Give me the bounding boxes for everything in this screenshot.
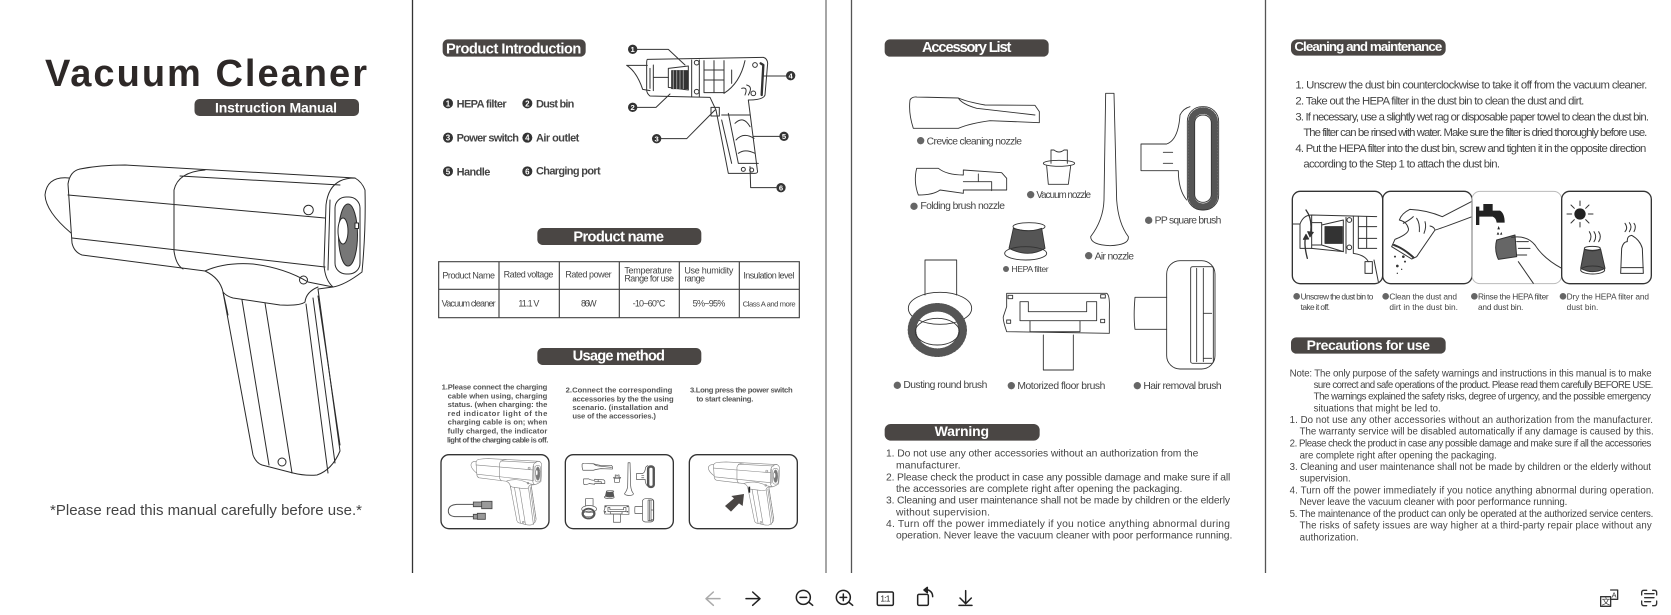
step 2 text: use of the accessories.) (572, 412, 656, 421)
warning list: 3. Cleaning and user maintenance shall not be made by children or the elderly (886, 496, 1231, 507)
table: product specifications: Vacuum cleaner (442, 299, 496, 309)
precautions list: supervision. (1300, 474, 1351, 485)
diagram: cutaway with numbered callouts: 6 (779, 183, 783, 192)
picture captions: dirt in the dust bin. (1389, 302, 1458, 312)
table: product specifications: Rated voltage (504, 270, 553, 280)
parts list: 1 (446, 99, 451, 108)
step 2 text: scenario. (installation and (572, 403, 669, 412)
heading: Usage method (537, 348, 701, 365)
diagram: cutaway with numbered callouts: 1 (631, 45, 636, 54)
precautions list: 5. The maintenance of the product can only be operated at the authorized service centers. (1290, 509, 1653, 520)
warning list: 1. Do not use any other accessories without an authorization from the (886, 449, 1199, 460)
heading: Product name (537, 228, 701, 246)
picture captions: Clean the dust and (1389, 291, 1457, 301)
parts list: 3 (446, 134, 451, 143)
accessory labels: Folding brush nozzle (920, 201, 1005, 212)
diagram: cutaway with numbered callouts: 3 (655, 134, 659, 143)
accessory labels (894, 136, 1222, 392)
step 3 text (690, 385, 793, 403)
step 1 text (442, 382, 548, 444)
accessory labels: Motorized floor brush (1017, 381, 1106, 392)
precautions list: 4. Turn off the power immediately if you notice anything abnormal during operation. (1290, 485, 1654, 496)
subtitle pill (194, 99, 359, 116)
step 2 text: 2.Connect the corresponding (566, 385, 673, 394)
picture captions (1293, 291, 1649, 312)
step 2 text (566, 385, 674, 421)
picture captions: Rinse the HEPA filter (1478, 291, 1549, 301)
diagram: cutaway with numbered callouts: 2 (631, 103, 635, 112)
step 3 text: to start cleaning. (696, 394, 753, 403)
table: product specifications: Product Name (442, 271, 495, 281)
step 1 text: status. (when charging: the (448, 400, 547, 409)
step 3 text: 3.Long press the power switch (690, 385, 793, 394)
page divider (412, 0, 414, 573)
parts list: HEPA filter (457, 98, 507, 110)
parts list: 5 (446, 167, 451, 176)
cleaning steps: The filter can be rinsed with water. Make sure the filter is dried thoroughly before use. (1303, 127, 1647, 139)
warning list: 4. Turn off the power immediately if you notice anything abnormal during (886, 519, 1230, 530)
heading: Usage method: Usage method (573, 349, 665, 365)
table: product specifications: Range for use (624, 274, 674, 284)
heading: Precautions for use: Precautions for use (1307, 337, 1430, 353)
accessory labels: PP square brush (1155, 215, 1222, 226)
step 1 text: light of the charging cable is off. (447, 435, 548, 444)
cleaning steps: according to the Step 1 to attach the dust bin. (1303, 159, 1500, 171)
picture: rinse filter (1472, 191, 1562, 284)
diagram: cutaway with numbered callouts (627, 45, 795, 192)
table: product specifications: Temperature (624, 266, 672, 276)
accessory labels: Vacuum nozzle (1036, 190, 1091, 201)
step 1 text: charging cable is on; when (448, 418, 548, 427)
precautions list: Never leave the vacuum cleaner with poor performance running. (1300, 497, 1567, 508)
table: product specifications: -10~60°C (633, 299, 666, 309)
precautions list: sure correct and safe operations of the product. Please read them carefully BEFORE USE. (1314, 380, 1653, 391)
step 1 text: fully charged, the indicator (448, 426, 547, 435)
icon: translate: A (1612, 591, 1617, 600)
diagram: cutaway with numbered callouts: 4 (789, 71, 794, 80)
panel: precautions for use (1290, 337, 1657, 607)
table: product specifications: 5%~95% (693, 299, 725, 309)
table: product specifications: Rated power (565, 270, 612, 280)
accessory drawings (908, 93, 1219, 370)
precautions list: situations that might be led to. (1314, 403, 1441, 414)
step 1 text: 1.Please connect the charging (442, 382, 548, 391)
toolbar (706, 587, 972, 605)
precautions list: The risks of safety issues are way higher at a third-party repair place without any (1300, 521, 1652, 532)
icon: scan text (1642, 590, 1657, 606)
table: product specifications: Use humidity (684, 266, 734, 276)
panel: cleaning and maintenance (1291, 39, 1651, 312)
precautions list: are complete right after opening the packaging. (1300, 450, 1497, 461)
panel: accessory list (885, 39, 1222, 392)
accessory labels: HEPA filter (1011, 264, 1049, 274)
panel: warning (885, 423, 1232, 542)
table: product specifications: 11.1 V (518, 299, 539, 309)
warning list: operation. Never leave the vacuum cleaner with poor performance running. (896, 531, 1232, 542)
parts list: Air outlet (536, 132, 580, 144)
icon: zoom out (796, 590, 813, 605)
picture captions: Dry the HEPA filter and (1567, 291, 1649, 301)
icon: next arrow (746, 592, 760, 605)
heading: Accessory List (885, 39, 1049, 57)
picture captions: take it off. (1301, 302, 1330, 312)
precautions list: 3. Cleaning and user maintenance shall not be made by children or the elderly without (1290, 462, 1651, 473)
step 3 picture (689, 455, 797, 529)
picture captions: Unscrew the dust bin to (1301, 291, 1374, 301)
icon: actual size: 1:1 (880, 594, 891, 604)
precautions list: Note: The only purpose of the safety warnings and instructions in this manual is to make (1290, 368, 1652, 379)
table: product specifications: range (684, 274, 705, 284)
cleaning steps: 1. Unscrew the dust bin counterclockwise to take it off from the vacuum cleaner. (1295, 80, 1647, 92)
heading: Warning (885, 423, 1040, 441)
accessory labels: Hair removal brush (1143, 381, 1222, 392)
heading: Cleaning and maintenance: Cleaning and maintenance (1294, 39, 1442, 54)
title: Vacuum Cleaner (45, 53, 367, 95)
panel: cover (45, 53, 367, 519)
parts list: 2 (525, 99, 530, 108)
diagram: cutaway with numbered callouts: 5 (782, 132, 787, 141)
accessory labels: Crevice cleaning nozzle (927, 136, 1022, 147)
parts list: Power switch (457, 132, 519, 144)
footer note: *Please read this manual carefully before use.* (50, 502, 362, 519)
illustration: vacuum cleaner (45, 165, 365, 475)
warning list: 2. Please check the product in case any possible damage and make sure if all (886, 472, 1230, 483)
cleaning steps: 3. If necessary, use a slightly wet rag or disposable paper towel to clean the dust bin. (1295, 111, 1649, 123)
precautions list: 2. Please check the product in case any possible damage and make sure if all the accessories (1290, 439, 1652, 450)
icon: zoom in (836, 590, 853, 605)
icon: translate: 文 (1602, 596, 1611, 607)
step 1 text: cable when using, charging (448, 391, 548, 400)
parts list: 6 (525, 167, 530, 176)
picture: unscrew dust bin (1292, 191, 1383, 284)
table: product specifications: Insulation level (743, 271, 794, 281)
step 2 picture (565, 455, 673, 529)
precautions list: The warnings explained the safety risks, degree of urgency, and the possible emergency (1314, 392, 1651, 403)
parts list (443, 98, 601, 178)
cleaning steps (1295, 80, 1649, 171)
precautions list: authorization. (1300, 532, 1359, 543)
accessory labels: Air nozzle (1095, 251, 1134, 262)
heading: Warning: Warning (935, 423, 989, 439)
icon: translate (1601, 590, 1618, 607)
precautions list: 1. Do not use any other accessories without an authorization from the manufacturer. (1290, 415, 1653, 426)
accessory labels: Dusting round brush (903, 380, 988, 391)
table: product specifications: Class A and more (743, 299, 796, 308)
heading: Product Introduction: Product Introduction (446, 41, 581, 57)
parts list: Handle (457, 166, 490, 178)
table: product specifications: 86W (581, 299, 597, 309)
step 2 text: accessories by the the using (572, 394, 674, 403)
table: product specifications (439, 262, 799, 318)
warning list: the accessories are complete right after opening the packaging. (896, 484, 1182, 495)
precautions list: The warranty service will be disabled automatically if any damage is caused by this. (1300, 427, 1654, 438)
icon: download (959, 591, 972, 605)
warning list (886, 449, 1232, 542)
subtitle pill: Instruction Manual (215, 100, 337, 116)
picture: dry filter (1562, 191, 1651, 284)
cleaning steps: 4. Put the HEPA filter into the dust bin, screw and tighten it in the opposite direction (1295, 143, 1646, 155)
picture captions: dust bin. (1567, 302, 1598, 312)
panel: usage method (441, 348, 797, 529)
panel: product introduction (439, 39, 799, 318)
picture: empty dust bin (1383, 191, 1472, 284)
cleaning steps: 2. Take out the HEPA filter in the dust bin to clean the dust and dirt. (1295, 95, 1584, 107)
heading: Product name: Product name (573, 230, 664, 246)
heading: Accessory List: Accessory List (922, 40, 1011, 56)
icon: previous arrow (706, 592, 720, 605)
parts list: 4 (525, 134, 530, 143)
warning list: manufacturer. (896, 460, 961, 471)
warning list: without supervision. (895, 507, 990, 518)
parts list: Dust bin (536, 98, 575, 110)
step 1 picture (441, 455, 549, 529)
precautions list (1290, 368, 1654, 543)
parts list: Charging port (536, 166, 601, 178)
icon: actual size (877, 592, 893, 605)
picture captions: and dust bin. (1478, 302, 1523, 312)
step 1 text: red indicator light of the (448, 409, 547, 418)
icon: rotate (918, 587, 933, 605)
